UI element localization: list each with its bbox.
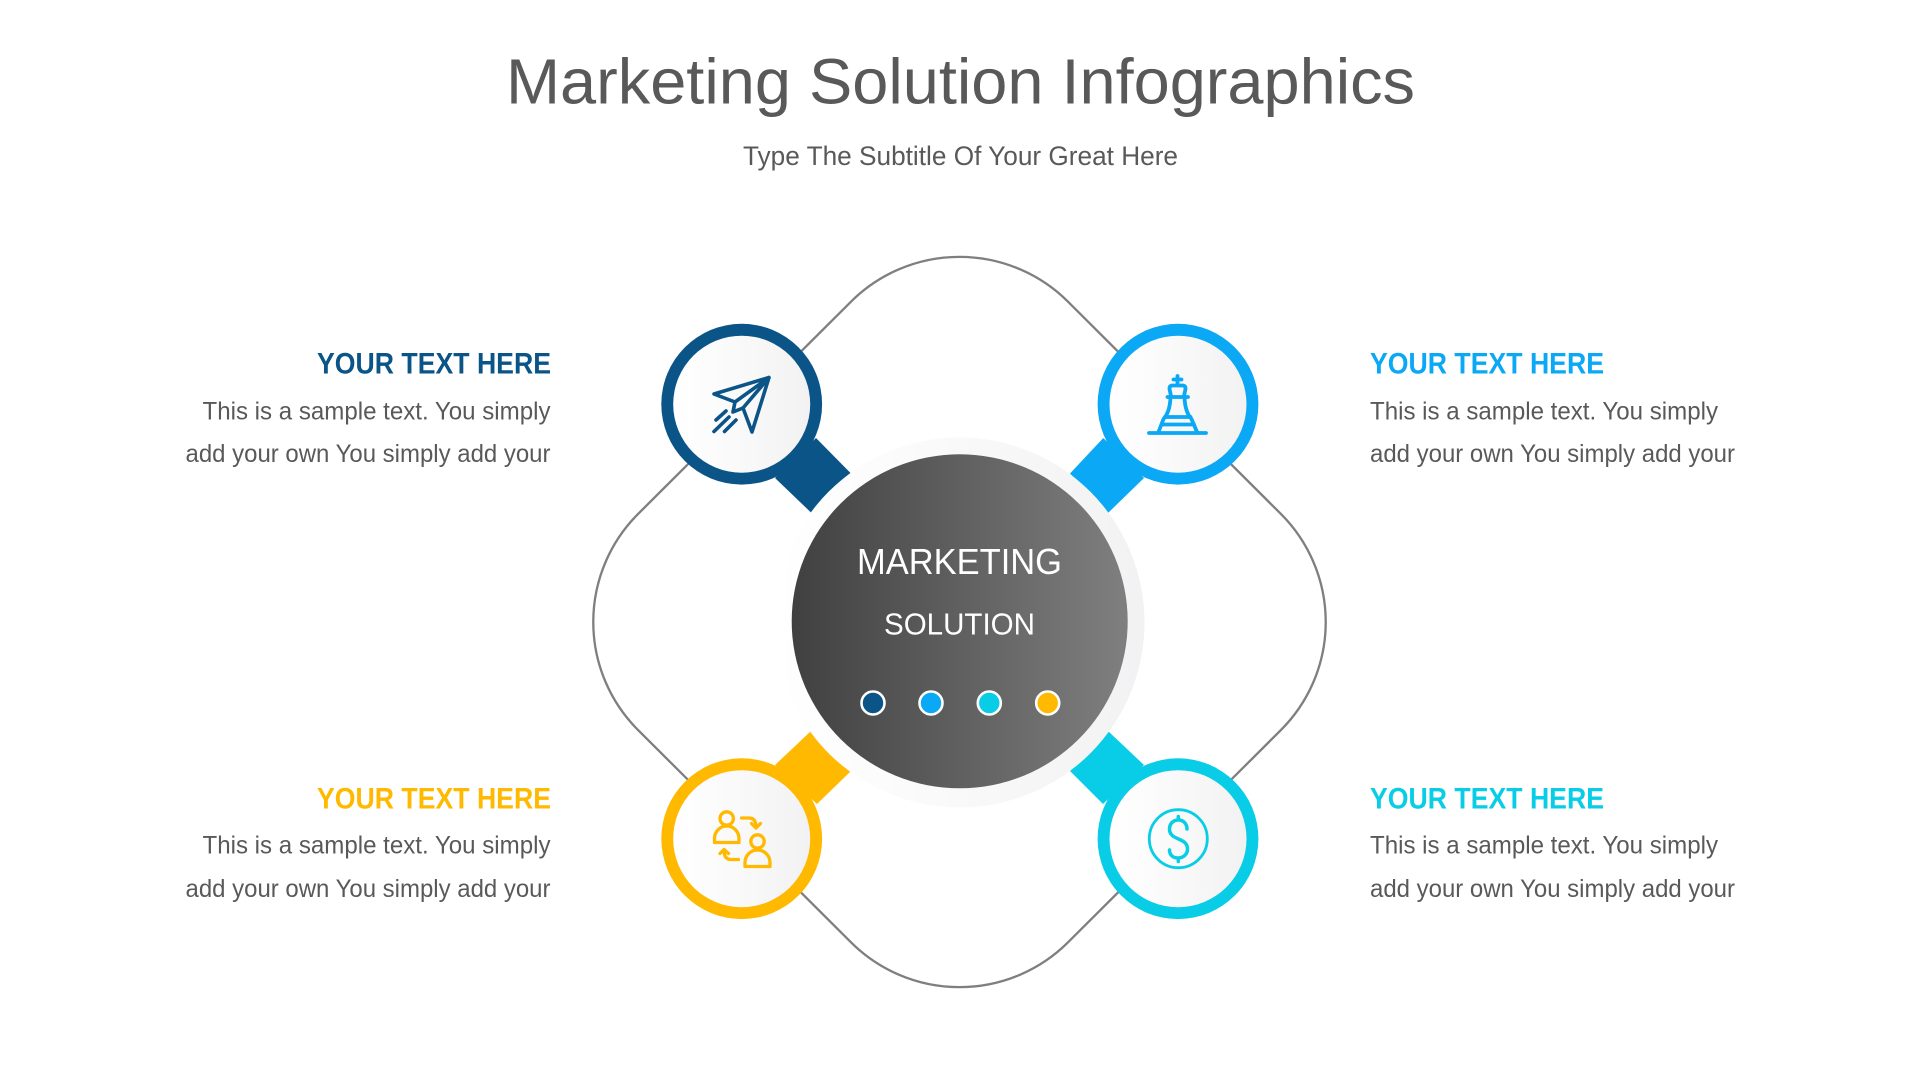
icon: people exchange [714, 812, 770, 866]
panel: centre hub [774, 438, 1144, 808]
icon: paper plane [714, 378, 769, 432]
badge face [1110, 770, 1246, 907]
body: top left: This is a sample text. You simply [202, 397, 551, 425]
handle: yellow [775, 731, 851, 804]
hub subheading: SOLUTION [884, 608, 1035, 642]
title: Marketing Solution Infographics [506, 46, 1415, 118]
badge face [1110, 336, 1246, 473]
icon: dollar coin [1149, 810, 1207, 868]
body: bottom right [1370, 831, 1735, 903]
hub heading: MARKETING [857, 541, 1062, 582]
ring: blue [1098, 324, 1258, 485]
text block: bottom left [186, 782, 551, 903]
panel: bottom-left yellow badge [661, 731, 851, 919]
body: top right [1370, 397, 1735, 468]
heading: bottom left: YOUR TEXT HERE [317, 782, 551, 816]
body: bottom right: add your own You simply add your [1370, 875, 1735, 903]
text block: top left [186, 348, 551, 468]
body: top right: This is a sample text. You simply [1370, 397, 1718, 425]
heading: bottom right: YOUR TEXT HERE [1370, 782, 1604, 816]
body: top left: add your own You simply add your [186, 440, 550, 468]
text block: bottom right [1370, 782, 1735, 903]
panel: top-left navy badge [661, 324, 851, 513]
body: bottom left: This is a sample text. You simply [202, 831, 551, 859]
legend dots [862, 692, 1059, 714]
subtitle: Type The Subtitle Of Your Great Here [743, 141, 1178, 171]
icon: chess king [1149, 376, 1206, 433]
hub outer ring [774, 438, 1144, 808]
handle: blue [1070, 438, 1144, 513]
panel: top-right blue badge [1070, 324, 1258, 513]
body: top right: add your own You simply add your [1370, 440, 1735, 468]
ring: yellow [661, 758, 822, 919]
badge face [673, 336, 810, 473]
badge face [673, 770, 810, 907]
ring: cyan [1098, 758, 1258, 919]
text block: top right [1370, 348, 1735, 468]
body: top left [186, 397, 551, 468]
handle: navy [775, 438, 851, 513]
rounded diamond outline [530, 193, 1389, 1051]
panel: bottom-right cyan badge [1070, 731, 1258, 919]
heading: top right: YOUR TEXT HERE [1370, 348, 1604, 380]
ring: navy [661, 324, 822, 485]
hub dark disc [792, 454, 1128, 788]
heading: top left: YOUR TEXT HERE [317, 348, 551, 380]
handle: cyan [1070, 731, 1144, 804]
body: bottom left: add your own You simply add your [186, 875, 550, 903]
body: bottom left [186, 831, 551, 903]
body: bottom right: This is a sample text. You simply [1370, 831, 1718, 859]
